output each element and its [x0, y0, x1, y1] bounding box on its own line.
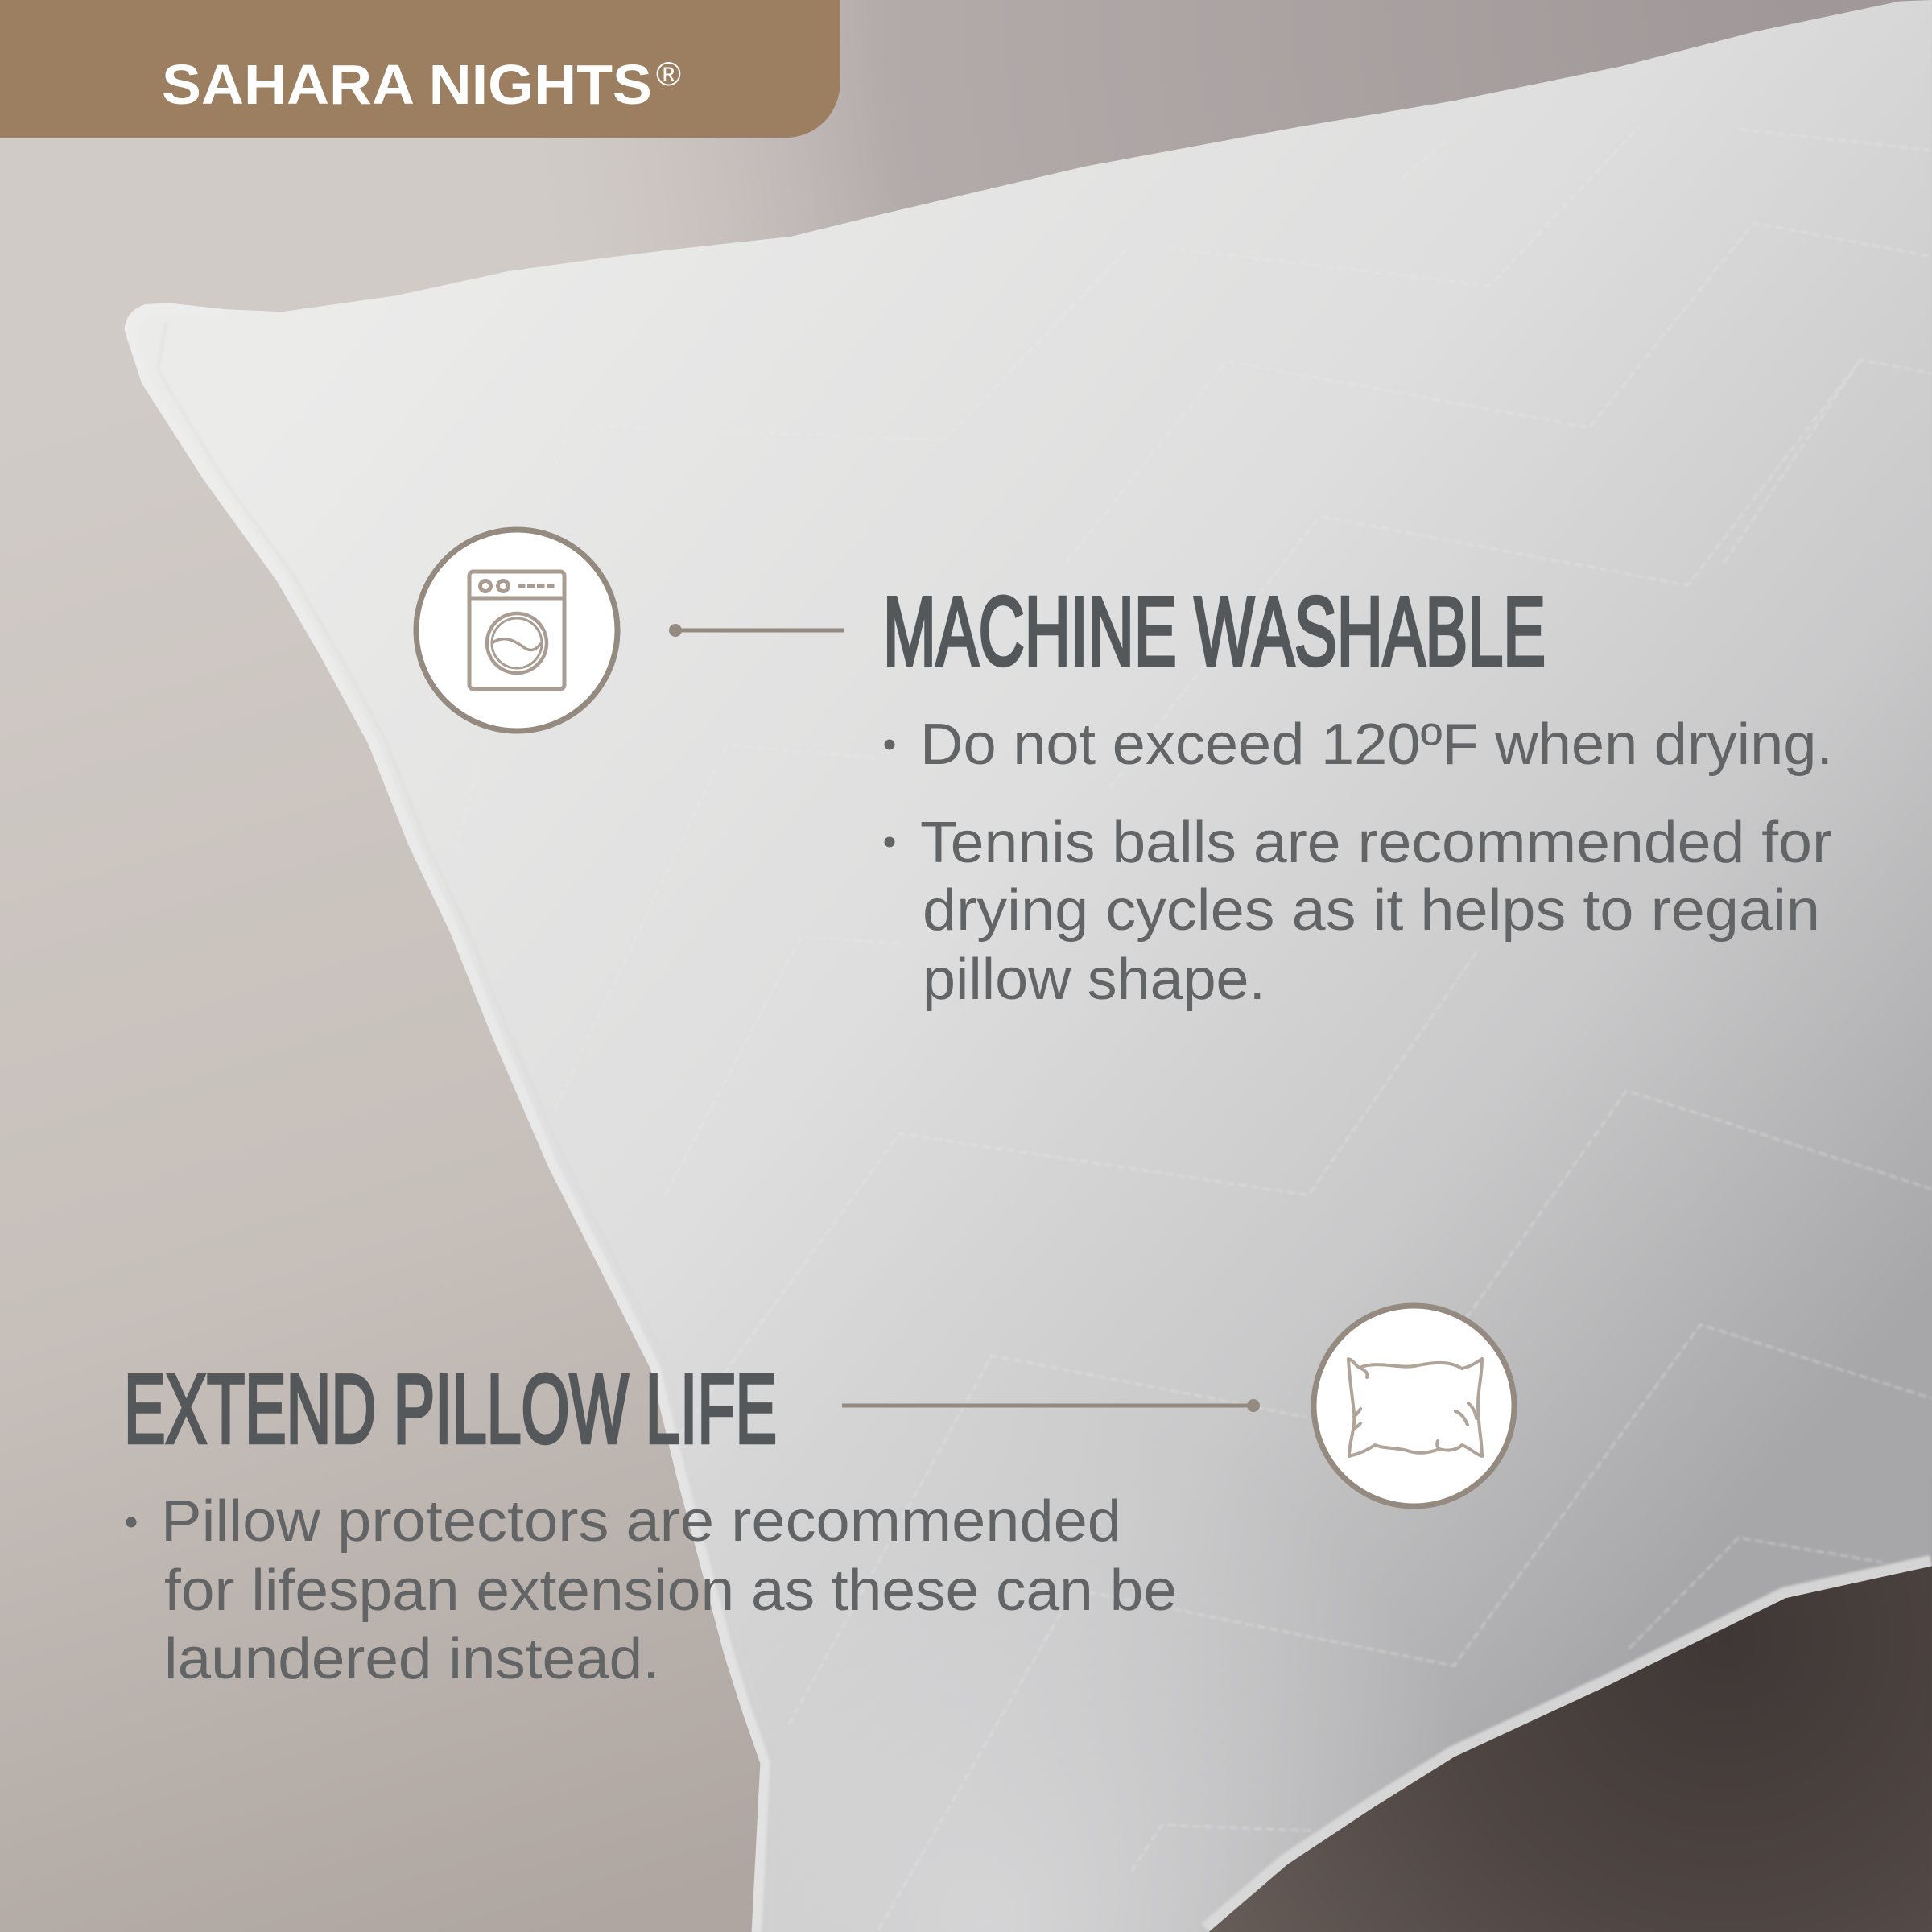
brand name: SAHARA NIGHTS — [162, 53, 652, 116]
text block: pillow protector tip: laundered instead. — [164, 1627, 659, 1691]
piping seam — [353, 715, 1932, 1932]
quilting stitches — [1091, 367, 1932, 1869]
text block: pillow protector tip: Pillow protectors are recommended — [161, 1489, 1121, 1554]
connector line: washable — [669, 624, 844, 637]
heading: extend pillow life: EXTEND PILLOW LIFE — [124, 1354, 777, 1463]
text block: washing tips — [884, 712, 1833, 1012]
text block: pillow protector tip: for lifespan extension as these can be — [164, 1558, 1177, 1623]
registered mark: ® — [656, 55, 681, 93]
icon: pillow — [1314, 1306, 1514, 1506]
text block: pillow protector tip — [126, 1489, 1177, 1691]
header banner — [0, 0, 840, 138]
heading: machine washable: MACHINE WASHABLE — [883, 576, 1546, 686]
text block: washing tips: Tennis balls are recommended for — [920, 811, 1832, 875]
connector line: pillow life — [842, 1399, 1260, 1412]
text block: washing tips: pillow shape. — [923, 947, 1265, 1012]
text block: washing tips: Do not exceed 120ºF when drying. — [920, 712, 1833, 777]
icon: washing machine — [416, 530, 617, 731]
text block: washing tips: drying cycles as it helps to regain — [923, 878, 1820, 943]
